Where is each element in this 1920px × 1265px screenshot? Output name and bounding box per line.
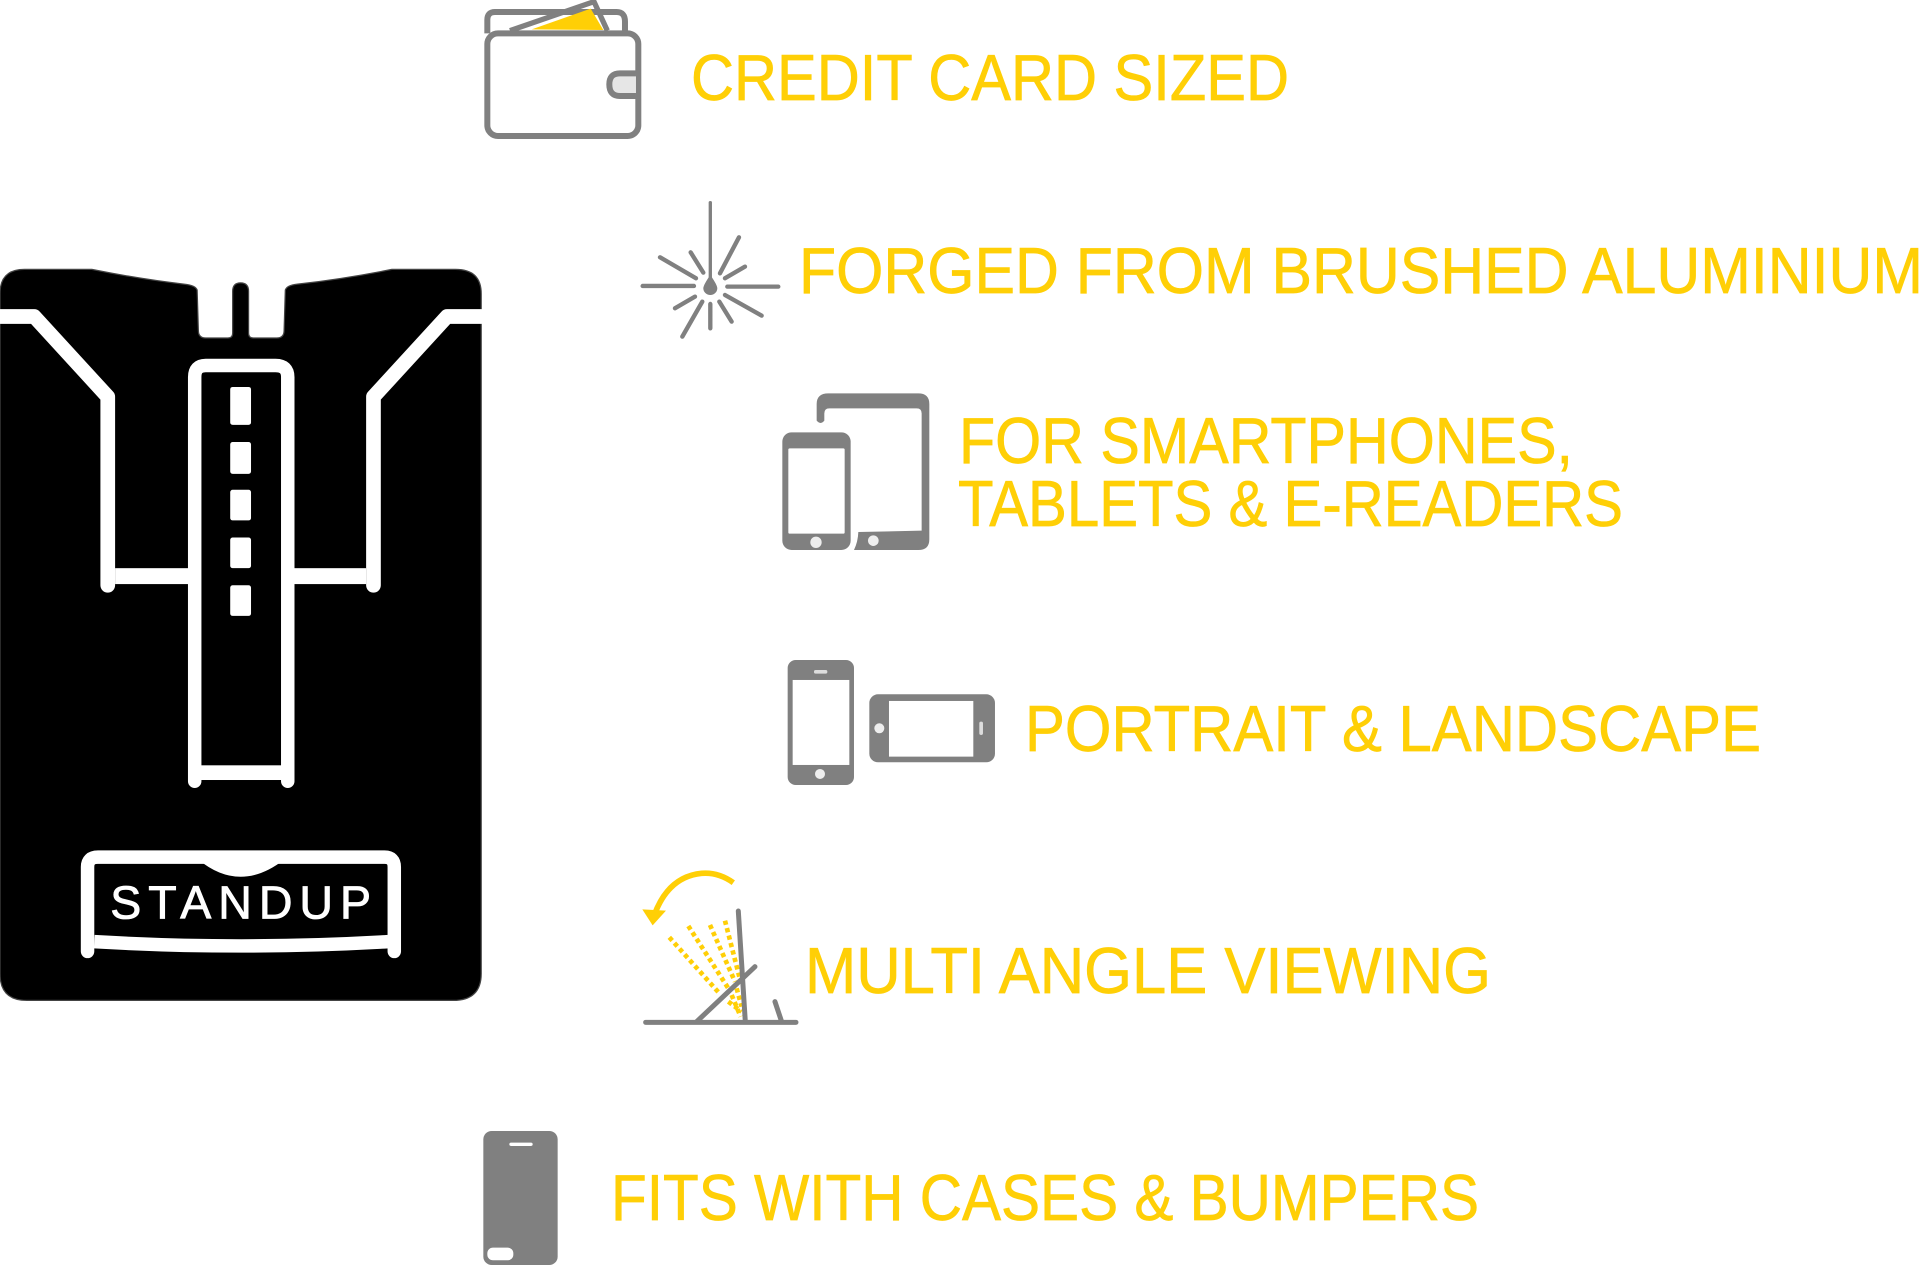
stand lines (646, 911, 796, 1022)
card body (0, 269, 481, 1000)
label: for smartphones, tablets and e-readers: FOR SMARTPHONES, (959, 404, 1573, 477)
label: multi angle viewing: MULTI ANGLE VIEWING (805, 934, 1491, 1007)
icon: multi angle stand (642, 873, 796, 1022)
viewing angle dots (669, 921, 742, 1017)
left cut-out arm (0, 317, 108, 585)
slot squares (230, 387, 251, 616)
right cut-out arm (373, 317, 481, 585)
label: portrait and landscape: PORTRAIT & LANDSCAPE (1025, 692, 1761, 765)
label: for smartphones, tablets and e-readers (958, 404, 1623, 540)
logo wordmark: STANDUP (110, 876, 371, 928)
right connecting bar (290, 568, 366, 584)
central U-shaped cut-out (195, 366, 288, 781)
icon: laser spark (643, 203, 778, 337)
tablet (817, 393, 929, 550)
label: for smartphones, tablets and e-readers: TABLETS & E-READERS (958, 467, 1623, 540)
left connecting bar (115, 568, 191, 584)
phone (782, 432, 851, 550)
icon: phone case (483, 1131, 558, 1265)
label: fits with cases and bumpers: FITS WITH CASES & BUMPERS (611, 1161, 1479, 1234)
icon: wallet (487, 2, 638, 136)
panel: black card stand (0, 269, 481, 1000)
icon: portrait and landscape phones (788, 660, 995, 785)
label: credit card sized: CREDIT CARD SIZED (691, 41, 1289, 114)
central crossbar (198, 765, 284, 780)
icon: phone and tablet (782, 393, 929, 550)
logo frame cut-out (88, 857, 394, 951)
rotation arrow (654, 873, 733, 915)
